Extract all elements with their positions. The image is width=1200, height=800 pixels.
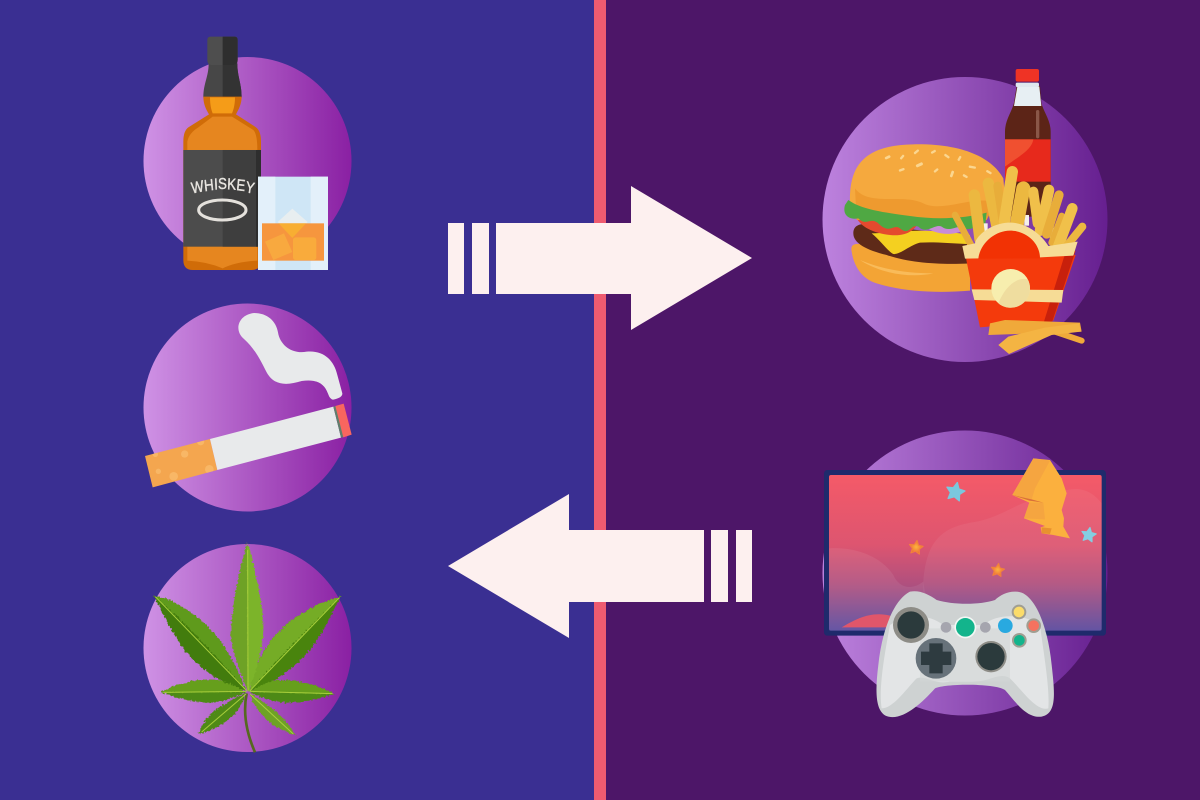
circle: cigarette backdrop [144, 304, 352, 512]
whiskey illustration [183, 37, 328, 270]
centre divider [594, 0, 606, 800]
fries and box [955, 172, 1082, 354]
icon: monitor and game controller [822, 430, 1108, 717]
arrow: pointing left [448, 494, 752, 638]
gaming illustration [824, 458, 1106, 717]
icon: cigarette [144, 304, 352, 512]
whisky glass [258, 177, 328, 270]
fast food illustration [844, 69, 1082, 354]
circle: fast food backdrop [822, 77, 1108, 362]
right background panel [605, 0, 1200, 800]
cola bottle [1005, 69, 1051, 217]
left background panel [0, 0, 595, 800]
monitor [824, 470, 1106, 636]
label text: whiskey: WHISKEY [190, 176, 256, 198]
stars [908, 481, 1097, 577]
lightning bolt [1012, 458, 1070, 538]
arrow: pointing right [448, 186, 752, 330]
circle: whiskey backdrop [144, 57, 352, 265]
game controller [876, 591, 1054, 717]
icon: burger, cola and fries [822, 69, 1108, 362]
fries box [962, 223, 1078, 327]
burger [844, 144, 1007, 292]
circle: cannabis backdrop [144, 544, 352, 752]
cigarette illustration [145, 313, 352, 487]
icon: whiskey bottle and glass [144, 37, 352, 270]
smoke [238, 313, 342, 400]
leaf illustration [154, 543, 341, 752]
circle: gaming backdrop [822, 430, 1108, 716]
loose fries [988, 320, 1082, 354]
french fries [955, 172, 1082, 246]
icon: cannabis leaf [144, 543, 352, 752]
